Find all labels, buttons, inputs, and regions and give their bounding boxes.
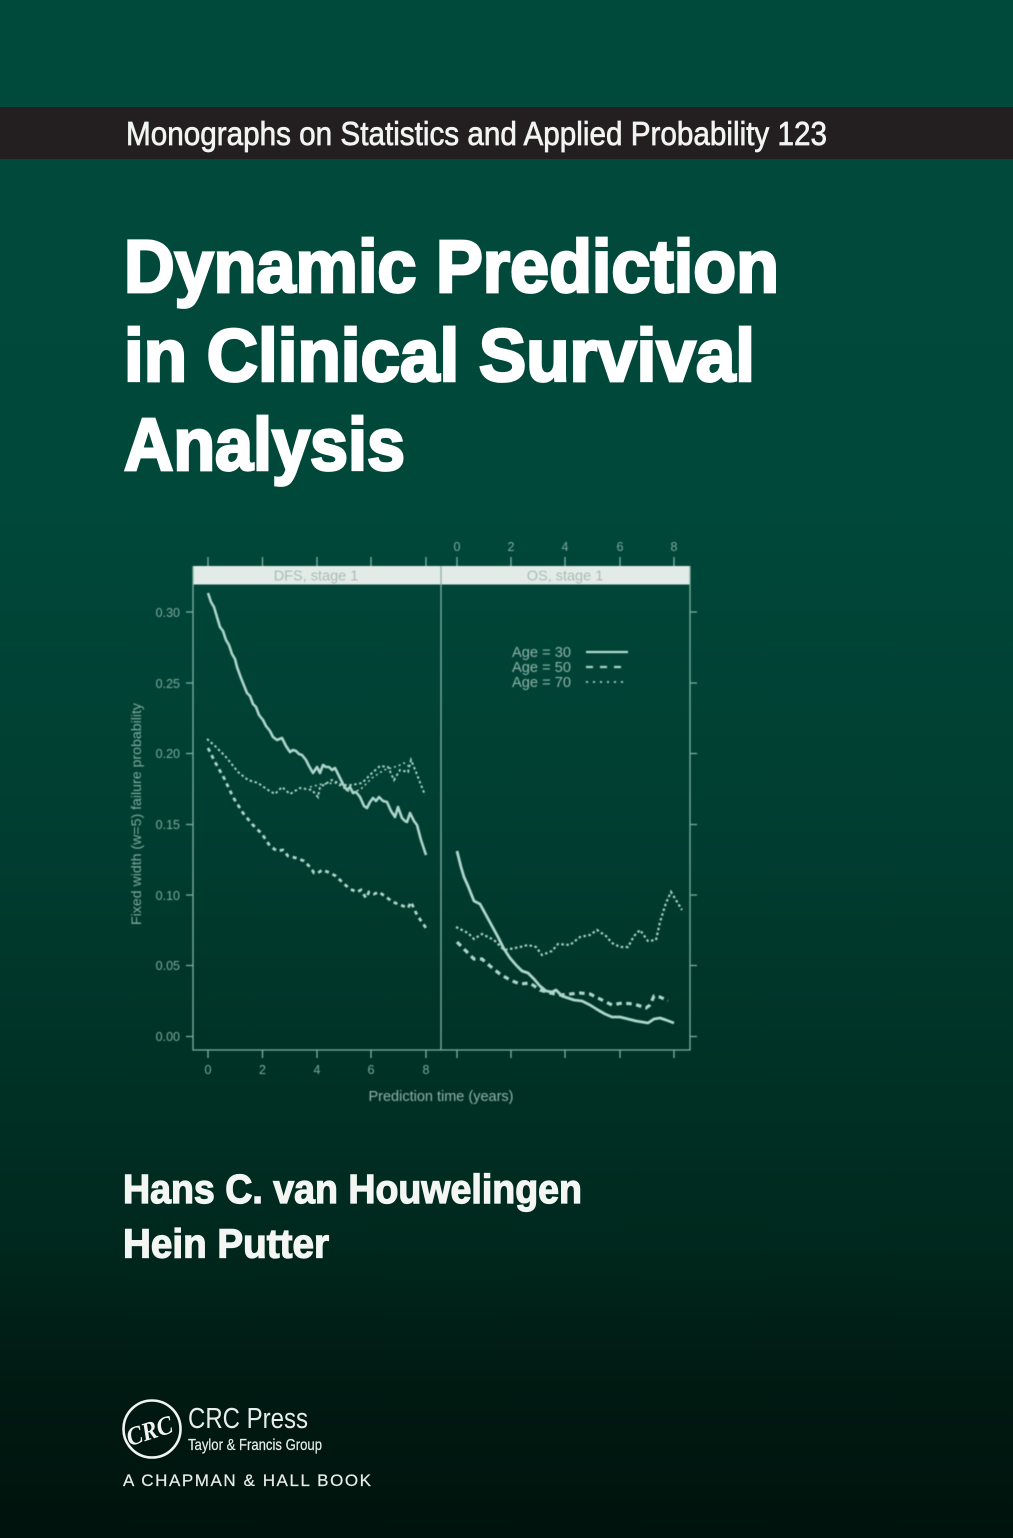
right panel: age 50 dashed	[457, 942, 668, 1008]
panel strip headers: OS, stage 1	[527, 568, 603, 584]
right panel: age 70 dotted	[456, 892, 682, 955]
left panel: age 30 solid	[208, 593, 426, 855]
authors	[123, 1166, 582, 1266]
series title: Monographs on Statistics and Applied Probability 123	[126, 115, 827, 152]
axes frame and ticks	[186, 557, 697, 1058]
x tick labels	[205, 540, 678, 1077]
x tick labels: 0	[205, 1063, 212, 1077]
y tick labels: 0.15	[156, 818, 180, 832]
legend: Age = 30	[512, 645, 571, 661]
x tick labels: 8	[671, 540, 678, 554]
y axis title: Fixed width (w=5) failure probability	[129, 703, 144, 925]
legend: Age = 70	[512, 675, 571, 691]
panel strip headers	[193, 566, 690, 584]
y tick labels: 0.05	[156, 959, 180, 973]
left panel: age 70 dotted	[207, 739, 425, 797]
y tick labels: 0.25	[156, 677, 180, 691]
x tick labels: 6	[368, 1063, 375, 1077]
panel strip headers: DFS, stage 1	[274, 568, 358, 584]
x tick labels: 2	[508, 540, 515, 554]
publisher group: Taylor & Francis Group	[188, 1437, 322, 1454]
y tick labels: 0.10	[156, 889, 180, 903]
y tick labels	[156, 606, 180, 1044]
chart	[129, 540, 697, 1105]
y tick labels: 0.30	[156, 606, 180, 620]
y tick labels: 0.00	[156, 1030, 180, 1044]
x tick labels: 6	[617, 540, 624, 554]
x tick labels: 8	[423, 1063, 430, 1077]
authors: Hans C. van Houwelingen	[123, 1166, 582, 1212]
icon: CRC roundel: CRC	[123, 1410, 177, 1452]
authors: Hein Putter	[123, 1220, 329, 1266]
right panel: age 30 solid	[457, 851, 674, 1023]
publisher name: CRC Press	[188, 1403, 308, 1435]
imprint: A CHAPMAN & HALL BOOK	[123, 1471, 372, 1490]
title	[124, 225, 779, 486]
x tick labels: 4	[562, 540, 569, 554]
left panel: age 50 dashed	[208, 748, 426, 928]
title: Analysis	[124, 403, 405, 486]
title: in Clinical Survival	[124, 314, 755, 397]
y tick labels: 0.20	[156, 747, 180, 761]
x axis title: Prediction time (years)	[368, 1089, 514, 1105]
x tick labels: 0	[454, 540, 461, 554]
x tick labels: 4	[314, 1063, 321, 1077]
series band	[0, 107, 1013, 159]
title: Dynamic Prediction	[124, 225, 779, 308]
legend: Age = 50	[512, 660, 571, 676]
x tick labels: 2	[259, 1063, 266, 1077]
publisher logo	[123, 1400, 372, 1490]
legend	[512, 645, 628, 691]
